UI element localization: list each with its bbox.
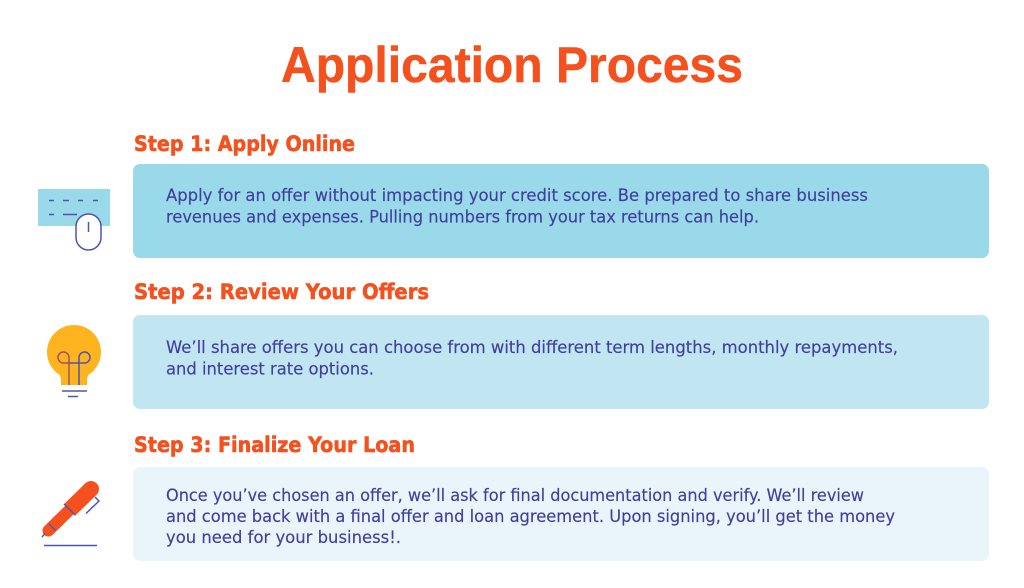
panel: step 1 description: Apply for an offer without impacting your credit score. Be prepared to share business [166,186,868,205]
panel: step 1 description: revenues and expenses. Pulling numbers from your tax returns can help. [166,208,759,226]
panel: step 3 description: Once you’ve chosen an offer, we’ll ask for final documentation and verify. We’ll review [166,486,864,505]
step 1 heading: Step 1: Apply Online [134,132,355,156]
panel: step 3 description [133,467,989,561]
panel: step 2 description [133,315,989,409]
panel: step 2 description: and interest rate options. [166,360,374,378]
panel: step 3 description: and come back with a final offer and loan agreement. Upon signing, you’ll get the money [166,507,895,526]
step 2 group [47,280,989,409]
step 3 heading: Step 3: Finalize Your Loan [134,433,415,457]
panel: step 1 description [133,164,989,258]
icon: computer mouse on form [38,189,110,250]
icon: light bulb [47,325,101,396]
panel: step 3 description: you need for your business!. [166,528,401,547]
panel: step 2 description: We’ll share offers you can choose from with different term lengths, monthly repayments, [166,338,898,357]
step 1 group [38,132,989,258]
step 2 heading: Step 2: Review Your Offers [134,280,429,304]
title: Application Process [281,37,743,93]
step 3 group [42,433,989,561]
icon: pen [42,481,99,546]
